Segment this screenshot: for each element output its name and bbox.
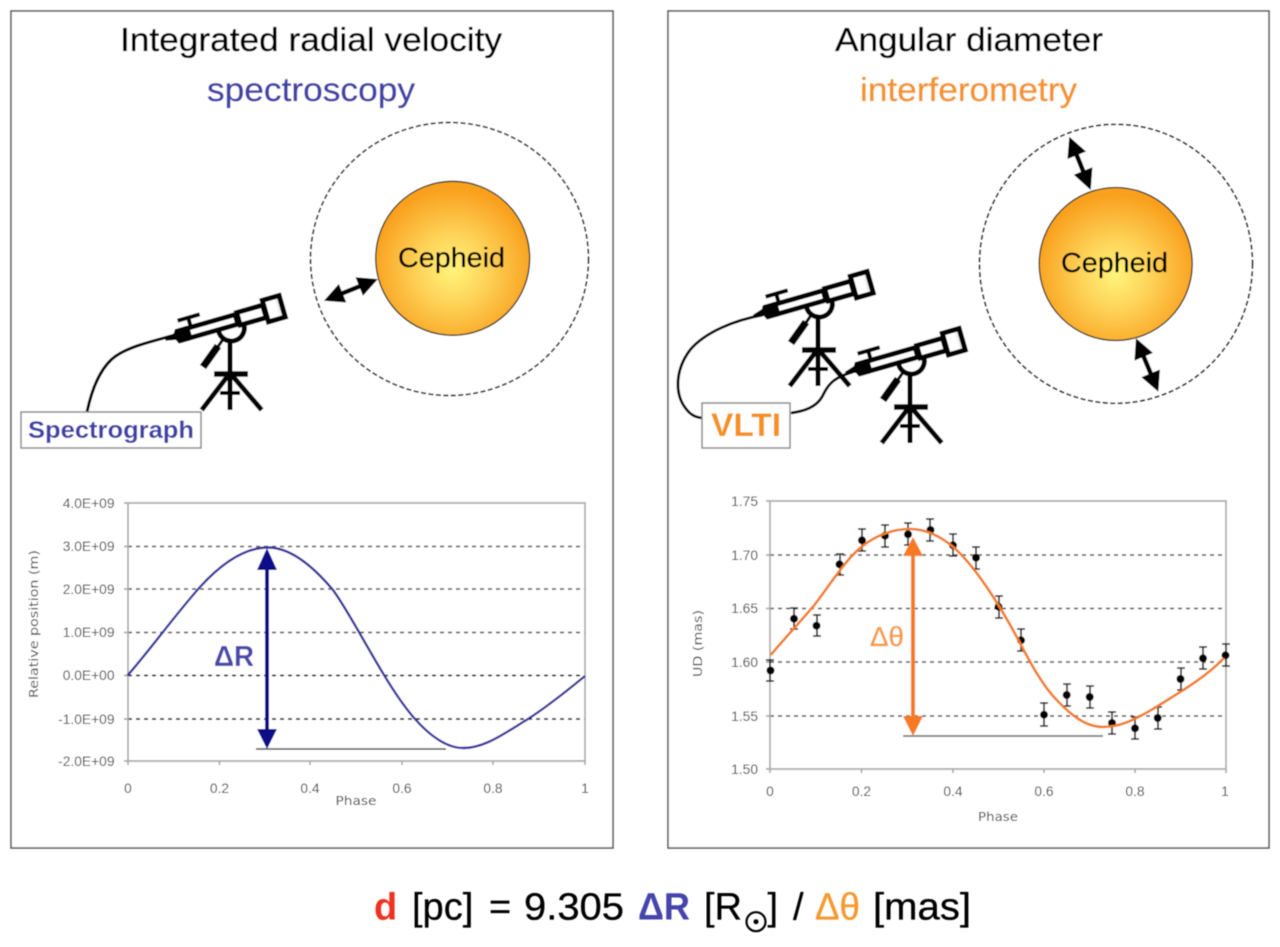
curve: angular diameter fit xyxy=(771,529,1224,727)
y axis labels xyxy=(58,496,115,769)
formula: distance: [pc] xyxy=(412,886,473,928)
arrow: bottom angular displacement xyxy=(1127,334,1168,396)
y axis labels: 1.75 xyxy=(731,494,758,509)
y axis labels: 4.0E+09 xyxy=(63,496,115,511)
y axis labels: -1.0E+09 xyxy=(58,712,115,727)
star: Cepheid: Cepheid xyxy=(1061,247,1168,278)
icon: upper telescope xyxy=(749,268,873,386)
x axis labels: 0 xyxy=(124,781,132,796)
cable: lower telescope to VLTI xyxy=(791,372,853,413)
dashed pulsation envelope xyxy=(980,124,1252,403)
panel frame right xyxy=(668,11,1269,848)
x axis labels: 1 xyxy=(581,781,589,796)
subheading: interferometry: interferometry xyxy=(860,71,1078,108)
x axis labels: 0 xyxy=(766,784,774,799)
panel: integrated radial velocity xyxy=(11,11,613,848)
formula: distance: [mas] xyxy=(873,886,971,928)
y axis labels: 1.70 xyxy=(731,548,758,563)
x axis title: Phase xyxy=(978,809,1018,824)
y axis labels: 0.0E+00 xyxy=(63,668,115,683)
data points with error bars xyxy=(766,519,1230,739)
y axis labels: 3.0E+09 xyxy=(63,539,115,554)
curve: radial displacement xyxy=(128,548,585,748)
icon: telescope xyxy=(161,292,285,410)
baseline at minimum xyxy=(256,748,446,750)
heading: integrated radial velocity: Integrated radial velocity xyxy=(120,21,503,58)
x axis labels: 0.4 xyxy=(943,784,963,799)
panel: angular diameter xyxy=(668,11,1269,848)
label: Spectrograph: Spectrograph xyxy=(28,417,194,444)
x axis labels: 0.8 xyxy=(483,781,503,796)
star: Cepheid xyxy=(376,181,530,335)
x axis labels xyxy=(124,781,589,796)
y axis title: UD (mas) xyxy=(690,610,705,677)
x axis labels: 0.2 xyxy=(852,784,871,799)
arrow: delta R xyxy=(257,548,277,749)
cable: upper telescope to VLTI xyxy=(678,315,763,418)
y axis labels: -2.0E+09 xyxy=(58,754,115,769)
y axis labels: 2.0E+09 xyxy=(63,582,115,597)
arrow: top angular displacement xyxy=(1060,133,1100,194)
star: Cepheid: Cepheid xyxy=(398,242,505,273)
line chart: relative position vs phase xyxy=(26,496,589,808)
scatter chart: uniform disc diameter vs phase xyxy=(690,494,1230,824)
label: Spectrograph xyxy=(21,412,201,448)
y axis labels: 1.60 xyxy=(731,655,758,670)
cable to spectrograph xyxy=(87,335,175,412)
baseline at minimum xyxy=(903,735,1103,737)
x axis labels: 0.2 xyxy=(210,781,229,796)
x axis labels: 1 xyxy=(1221,784,1229,799)
arrow: delta theta xyxy=(903,537,923,736)
y axis labels xyxy=(731,494,758,777)
label: VLTI: VLTI xyxy=(711,407,781,443)
star: Cepheid xyxy=(1039,188,1192,340)
y axis labels: 1.55 xyxy=(731,709,758,724)
formula: distance: = xyxy=(489,886,511,928)
subheading: spectroscopy: spectroscopy xyxy=(207,71,416,108)
formula: distance: ] xyxy=(768,886,778,928)
y axis labels: 1.50 xyxy=(731,762,758,777)
arrow: radial displacement xyxy=(320,270,382,310)
formula: distance: [R xyxy=(704,886,742,928)
dashed pulsation envelope xyxy=(310,122,588,396)
x axis labels: 0.6 xyxy=(392,781,412,796)
x axis labels: 0.4 xyxy=(300,781,320,796)
y axis labels: 1.65 xyxy=(731,601,758,616)
x axis labels xyxy=(766,784,1229,799)
panel frame left xyxy=(11,11,613,848)
y axis labels: 1.0E+09 xyxy=(63,625,115,640)
formula: distance: Δθ xyxy=(815,886,860,928)
label: delta R: ΔR xyxy=(214,641,254,673)
formula: distance: d xyxy=(374,886,397,928)
x axis title: Phase xyxy=(336,793,377,808)
x axis labels: 0.6 xyxy=(1034,784,1054,799)
formula: distance: ΔR xyxy=(638,886,690,928)
formula: distance: / xyxy=(793,886,804,928)
y axis title: Relative position (m) xyxy=(26,550,41,698)
label: VLTI xyxy=(702,403,790,448)
formula: distance: 9.305 xyxy=(524,886,624,928)
label: delta theta: Δθ xyxy=(870,621,904,652)
x axis labels: 0.8 xyxy=(1125,784,1145,799)
formula: distance xyxy=(374,886,971,931)
heading: angular diameter: Angular diameter xyxy=(835,21,1103,58)
icon: lower telescope xyxy=(841,325,965,443)
